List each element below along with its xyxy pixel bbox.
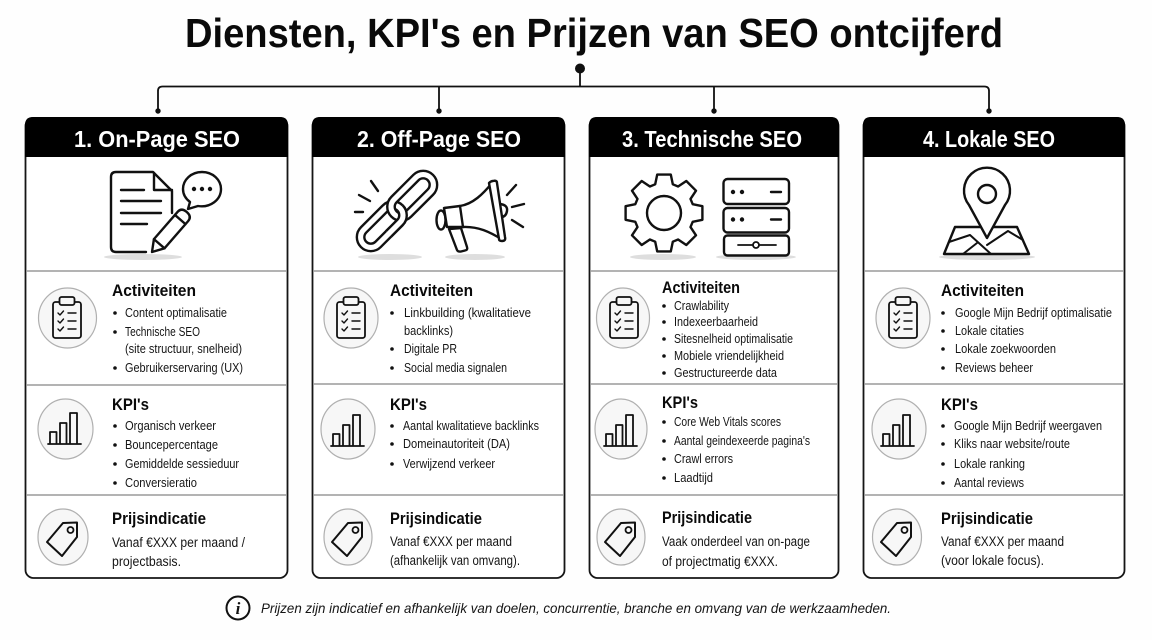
section: Activiteiten: Activiteiten — [390, 281, 473, 300]
section: Prijsindicatie: (afhankelijk van omvang). — [390, 553, 520, 568]
section: KPI's: Aantal reviews — [954, 475, 1024, 490]
section: Prijsindicatie: Prijsindicatie — [662, 508, 752, 527]
icon: server rack — [716, 179, 796, 260]
section: KPI's: Kliks naar website/route — [954, 436, 1070, 451]
section: KPI's: Core Web Vitals scores — [674, 414, 781, 429]
section: Activiteiten: Lokale citaties — [955, 323, 1024, 338]
section: KPI's: Google Mijn Bedrijf weergaven — [954, 418, 1102, 433]
panel: 1. On-Page SEO — [25, 117, 288, 578]
title: Diensten, KPI's en Prijzen van SEO ontcijferd — [185, 10, 1003, 56]
header: Off-Page SEO: 2. Off-Page SEO — [357, 126, 521, 152]
section: Activiteiten: backlinks) — [404, 323, 453, 338]
section: Activiteiten: Technische SEO — [125, 324, 200, 339]
section: Activiteiten: Activiteiten — [941, 281, 1024, 300]
section: Activiteiten: Activiteiten — [662, 278, 740, 297]
header: On-Page SEO — [25, 117, 288, 157]
section: Prijsindicatie: Prijsindicatie — [112, 509, 206, 528]
section: KPI's: Lokale ranking — [954, 456, 1025, 471]
section: KPI's: Aantal kwalitatieve backlinks — [403, 418, 539, 433]
section: Activiteiten: Google Mijn Bedrijf optimalisatie — [955, 305, 1112, 320]
icon: map with location pin — [939, 168, 1035, 260]
section: KPI's: Organisch verkeer — [125, 418, 217, 433]
icon: info — [226, 596, 250, 620]
section: Activiteiten: Content optimalisatie — [125, 305, 227, 320]
section: Activiteiten — [38, 281, 243, 375]
header: Technische SEO — [589, 117, 839, 157]
section: KPI's: KPI's — [941, 395, 978, 414]
section: Activiteiten: Sitesnelheid optimalisatie — [674, 331, 793, 346]
section: KPI's: Gemiddelde sessieduur — [125, 456, 240, 471]
section: KPI's: Crawl errors — [674, 451, 733, 466]
section: Prijsindicatie: Prijsindicatie — [390, 509, 482, 528]
section: Activiteiten: Mobiele vriendelijkheid — [674, 348, 784, 363]
section: KPI's: Verwijzend verkeer — [403, 456, 496, 471]
header: Lokale SEO — [863, 117, 1125, 157]
section: Prijsindicatie: (voor lokale focus). — [941, 553, 1044, 568]
section: Activiteiten: Activiteiten — [112, 281, 196, 300]
section: Activiteiten: Lokale zoekwoorden — [955, 341, 1056, 356]
section: Prijsindicatie: Vanaf €XXX per maand — [390, 534, 512, 549]
section: KPI's: Laadtijd — [674, 470, 713, 485]
section: KPI's: KPI's — [390, 395, 427, 414]
section: Activiteiten: Indexeerbaarheid — [674, 314, 758, 329]
section: Prijsindicatie: projectbasis. — [112, 554, 181, 569]
panel: 4. Lokale SEO — [863, 117, 1125, 578]
section: Activiteiten — [324, 281, 531, 375]
section: Prijsindicatie — [324, 509, 520, 568]
section: Prijsindicatie — [597, 508, 810, 569]
section: Prijsindicatie: Vanaf €XXX per maand / — [112, 535, 245, 550]
section: Activiteiten: Linkbuilding (kwalitatieve — [404, 305, 531, 320]
icon: document with pencil and speech bubble — [104, 172, 221, 260]
section: Prijsindicatie: of projectmatig €XXX. — [662, 554, 778, 569]
section: Prijsindicatie: Vaak onderdeel van on-page — [662, 534, 810, 549]
section: Activiteiten: (site structuur, snelheid) — [125, 341, 242, 356]
header: Off-Page SEO — [312, 117, 565, 157]
header: Technische SEO: 3. Technische SEO — [622, 126, 802, 152]
section: Prijsindicatie: Vanaf €XXX per maand — [941, 534, 1064, 549]
section: KPI's: Conversieratio — [125, 475, 197, 490]
section: Prijsindicatie — [38, 509, 245, 569]
section: Activiteiten — [876, 281, 1112, 375]
panel: 2. Off-Page SEO — [312, 117, 565, 578]
section: KPI's — [595, 393, 810, 485]
section: Activiteiten: Digitale PR — [404, 341, 457, 356]
header: On-Page SEO: 1. On-Page SEO — [74, 126, 240, 152]
section: Activiteiten: Crawlability — [674, 298, 729, 313]
section: Activiteiten: Gebruikerservaring (UX) — [125, 360, 243, 375]
icon: gear — [626, 175, 702, 260]
icon: megaphone — [436, 181, 524, 260]
section: Activiteiten — [596, 278, 793, 380]
section: KPI's: KPI's — [662, 393, 698, 412]
section: Activiteiten: Social media signalen — [404, 360, 507, 375]
icon: info: i — [236, 599, 241, 618]
section: KPI's — [321, 395, 539, 471]
header: Lokale SEO: 4. Lokale SEO — [923, 126, 1055, 152]
section: KPI's: Domeinautoriteit (DA) — [403, 436, 510, 451]
section: KPI's: KPI's — [112, 395, 149, 414]
section: KPI's: Bouncepercentage — [125, 437, 218, 452]
section: Prijsindicatie: Prijsindicatie — [941, 509, 1033, 528]
panel: 3. Technische SEO — [589, 117, 839, 578]
section: KPI's: Aantal geindexeerde pagina's — [674, 433, 810, 448]
icon: chain link — [354, 170, 438, 260]
section: KPI's — [872, 395, 1102, 490]
section: KPI's — [38, 395, 240, 490]
connector tree — [155, 64, 992, 114]
section: Activiteiten: Gestructureerde data — [674, 365, 778, 380]
footnote: Prijzen zijn indicatief en afhankelijk van doelen, concurrentie, branche en omvang van de werkzaamheden. — [261, 600, 891, 616]
section: Prijsindicatie — [872, 509, 1064, 568]
section: Activiteiten: Reviews beheer — [955, 360, 1034, 375]
